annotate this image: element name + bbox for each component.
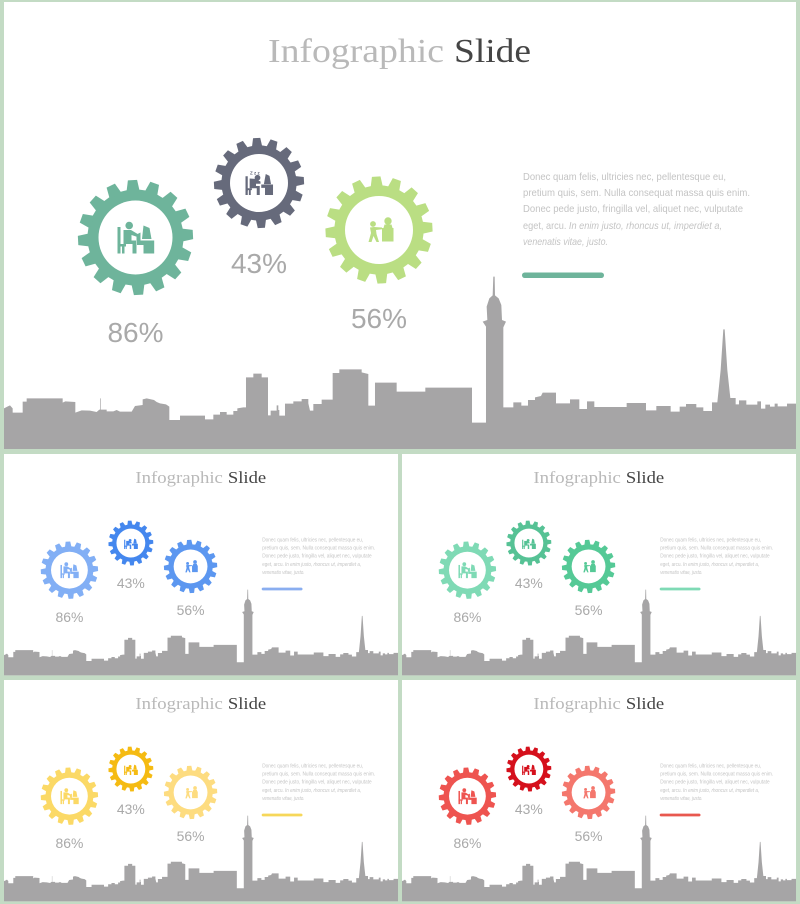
body text: pretium quis, sem. Nulla consequat massa quis enim.: [523, 187, 750, 199]
skyline silhouette: [4, 816, 398, 901]
skyline silhouette: [402, 816, 796, 901]
percentage 43%: 43%: [515, 801, 543, 817]
skyline silhouette: [4, 277, 796, 449]
body text: Donec quam felis, ultricies nec, pellentesque eu,: [262, 538, 363, 544]
body text: [660, 764, 773, 802]
body text: eget, arcu. In enim justo, rhoncus ut, imperdiet a,: [660, 788, 759, 794]
body text: [262, 538, 375, 576]
body text: venenatis vitae, justo.: [523, 236, 608, 248]
accent bar: [660, 588, 700, 590]
gear: sleeping worker 43%: [212, 136, 306, 230]
percentage 86%: 86%: [453, 609, 481, 625]
body text: pretium quis, sem. Nulla consequat massa quis enim.: [262, 772, 375, 778]
gear: sleeping worker 43%: Z z z: [250, 170, 260, 176]
gear: person and statue 56%: [323, 174, 435, 286]
slide: blue version: [4, 454, 398, 675]
slide background: [4, 680, 398, 901]
gear: desk worker 86%: [437, 540, 497, 600]
gear: sleeping worker 43%: [505, 520, 552, 567]
body text: eget, arcu. In enim justo, rhoncus ut, imperdiet a,: [660, 562, 759, 568]
slide: yellow version: [4, 680, 398, 901]
title: Slide: [454, 33, 531, 70]
gear: desk worker 86%: [39, 540, 99, 600]
gear: person and statue 56%: [163, 538, 219, 594]
percentage 56%: 56%: [575, 602, 602, 618]
accent bar: [262, 588, 302, 590]
skyline silhouette: [4, 590, 398, 675]
percentage 56%: 56%: [177, 828, 204, 844]
body text: eget, arcu. In enim justo, rhoncus ut, imperdiet a,: [262, 788, 361, 794]
gear: sleeping worker 43%: [107, 520, 154, 567]
body text: Donec pede justo, fringilla vel, aliquet nec, vulputate: [262, 553, 372, 559]
skyline silhouette: [402, 590, 796, 675]
gear: sleeping worker 43%: [107, 746, 154, 793]
title: Slide: [626, 468, 664, 487]
body text: venenatis vitae, justo.: [262, 570, 304, 576]
slide: green version: [402, 454, 796, 675]
title: Infographic: [135, 468, 223, 487]
title: Slide: [228, 468, 266, 487]
body text: Donec quam felis, ultricies nec, pellentesque eu,: [523, 171, 726, 183]
slide background: [402, 454, 796, 675]
percentage 56%: 56%: [351, 303, 407, 334]
title: Slide: [626, 694, 664, 713]
slide background: [402, 680, 796, 901]
percentage 43%: 43%: [117, 801, 145, 817]
accent bar: [660, 814, 700, 816]
gear: desk worker 86%: [437, 766, 497, 826]
body text: pretium quis, sem. Nulla consequat massa quis enim.: [660, 772, 773, 778]
percentage 43%: 43%: [515, 575, 543, 591]
percentage 43%: 43%: [231, 248, 287, 279]
title: Slide: [228, 694, 266, 713]
body text: [523, 171, 750, 248]
body text: Donec pede justo, fringilla vel, aliquet nec, vulputate: [262, 779, 372, 785]
title: Infographic: [533, 694, 621, 713]
body text: [262, 764, 375, 802]
slide background: [4, 454, 398, 675]
slide background: [4, 2, 796, 449]
gear: desk worker 86%: [39, 766, 99, 826]
body text: eget, arcu. In enim justo, rhoncus ut, imperdiet a,: [262, 562, 361, 568]
title: Infographic: [135, 694, 223, 713]
gear: sleeping worker 43%: [505, 746, 552, 793]
percentage 86%: 86%: [55, 609, 83, 625]
body text: [660, 538, 773, 576]
body text: venenatis vitae, justo.: [660, 570, 702, 576]
percentage 86%: 86%: [453, 835, 481, 851]
body text: Donec pede justo, fringilla vel, aliquet nec, vulputate: [523, 203, 743, 215]
percentage 86%: 86%: [55, 835, 83, 851]
slide: main grey-green version: [4, 2, 796, 449]
body text: Donec quam felis, ultricies nec, pellentesque eu,: [660, 538, 761, 544]
percentage 56%: 56%: [177, 602, 204, 618]
body text: Donec pede justo, fringilla vel, aliquet nec, vulputate: [660, 553, 770, 559]
gear: person and statue 56%: [561, 538, 617, 594]
accent bar: [262, 814, 302, 816]
percentage 43%: 43%: [117, 575, 145, 591]
slide: red version: [402, 680, 796, 901]
body text: pretium quis, sem. Nulla consequat massa quis enim.: [660, 546, 773, 552]
body text: Donec pede justo, fringilla vel, aliquet nec, vulputate: [660, 779, 770, 785]
gear: person and statue 56%: [163, 764, 219, 820]
body text: venenatis vitae, justo.: [262, 796, 304, 802]
body text: venenatis vitae, justo.: [660, 796, 702, 802]
gear: desk worker 86%: [75, 177, 196, 298]
title: Infographic: [533, 468, 621, 487]
body text: Donec quam felis, ultricies nec, pellentesque eu,: [660, 764, 761, 770]
percentage 86%: 86%: [108, 317, 164, 348]
percentage 56%: 56%: [575, 828, 602, 844]
body text: eget, arcu. In enim justo, rhoncus ut, imperdiet a,: [523, 220, 722, 232]
body text: Donec quam felis, ultricies nec, pellentesque eu,: [262, 764, 363, 770]
title: Infographic: [268, 33, 444, 70]
gear: person and statue 56%: [561, 764, 617, 820]
accent bar: [522, 272, 604, 278]
body text: pretium quis, sem. Nulla consequat massa quis enim.: [262, 546, 375, 552]
